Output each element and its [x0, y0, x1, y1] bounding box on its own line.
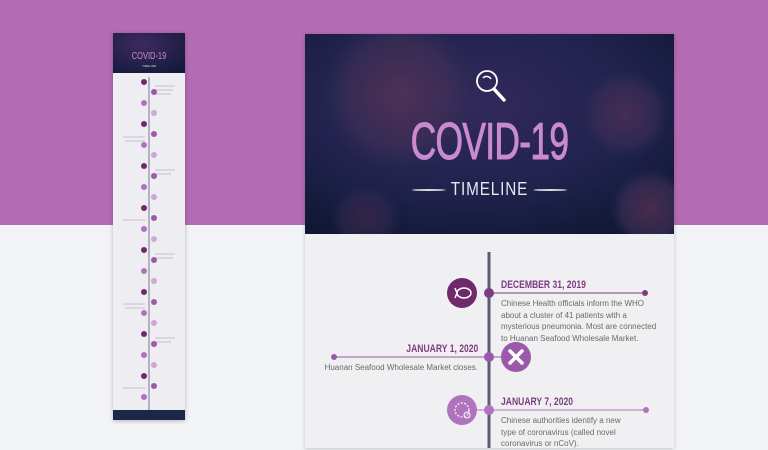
icon: magnifier virus [476, 70, 506, 102]
icon: virus [447, 395, 477, 425]
text: Dec 31: mysterious pneumonia. Most are connected [501, 322, 656, 331]
main panel [305, 34, 674, 448]
timeline [331, 252, 649, 448]
text: Jan 7 [501, 416, 621, 448]
purple top background [0, 0, 768, 225]
subtitle: timeline: TIMELINE [451, 179, 528, 199]
text: Dec 31: about a cluster of 41 patients with a [501, 310, 627, 320]
text: Dec 31 [501, 299, 656, 342]
entry: Jan 1 2020: JANUARY 1, 2020 [406, 343, 478, 355]
entry: Jan 7 2020: JANUARY 7, 2020 [501, 396, 573, 408]
title: COVID-19 [411, 113, 568, 171]
text: Jan 7: Chinese authorities identify a new [501, 416, 621, 425]
text: Jan 7: type of coronavirus (called novel [501, 428, 616, 436]
thumbnail: full infographic preview: COVID-19 [132, 50, 166, 61]
thumbnail: full infographic preview [113, 33, 185, 420]
icon: close [501, 342, 531, 372]
text: Jan 1: Huanan Seafood Wholesale Market closes. [325, 363, 478, 372]
text: Jan 7: coronavirus or nCoV). [501, 439, 579, 448]
icon: fish [447, 278, 477, 308]
entry: Dec 31 2019: DECEMBER 31, 2019 [501, 279, 586, 291]
text: Dec 31: to Huanan Seafood Wholesale Market. [501, 334, 638, 342]
header [305, 34, 674, 234]
text: Dec 31: Chinese Health officials inform the WHO [501, 299, 644, 308]
thumbnail: full infographic preview: TIMELINE [142, 64, 156, 68]
